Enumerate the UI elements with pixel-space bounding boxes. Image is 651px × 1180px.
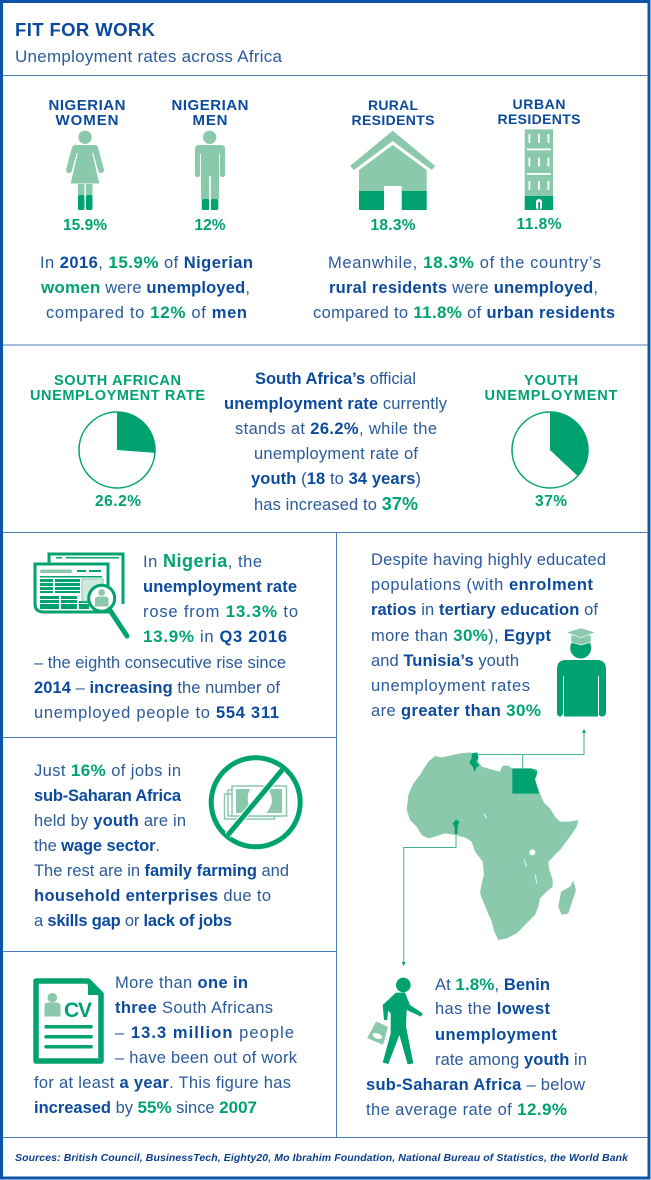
text: wage sector: sub-Saharan Africa [34,787,182,805]
text: Nigerian gender gap: women were unemployed, [40,278,250,297]
title: FIT FOR WORK [15,19,156,40]
panel: Nigeria unemployment [34,551,298,722]
text: South Africa summary [224,370,448,514]
text: out of work: More than one in [115,974,248,992]
icon: graduate [557,628,606,716]
text: rural and urban gap: rural residents were unemployed, [329,279,598,297]
text: Benin: sub-Saharan Africa – below [366,1076,585,1094]
icon: woman [69,131,101,210]
text: Egypt and Tunisia: are greater than 30% [371,701,541,720]
value: 37%: 37% [535,493,567,510]
text: Egypt and Tunisia: ratios in tertiary education of [371,601,598,619]
connector: Egypt and Tunisia to text [478,729,586,768]
text: out of work: three South Africans [115,999,273,1017]
icon: CV document: CV [64,999,92,1022]
heading: Nigerian women: WOMEN [56,112,118,129]
heading: South African unemployment rate [30,373,205,404]
country: Benin [453,819,459,834]
panel: CV and long-term unemployment [34,974,298,1117]
text: Benin [366,975,587,1119]
heading: rural residents: RURAL [368,97,418,113]
icon: no money [211,758,300,847]
text: Egypt and Tunisia: more than 30%), Egypt [371,626,552,645]
text: Nigeria unemployment rate: In Nigeria, the [143,551,262,571]
text: wage sector: The rest are in family farming and [34,862,289,880]
icon: CV document [36,979,102,1061]
text: South Africa summary: unemployment rate of [254,445,418,463]
text: wage sector: the wage sector. [34,837,160,855]
text: Benin: has the lowest [435,1000,550,1018]
text: Benin: At 1.8%, Benin [435,975,550,994]
text: Egypt and Tunisia: and Tunisia’s youth [371,652,519,670]
text: Nigerian gender gap [40,253,253,322]
panel: Nigeria and residents [40,96,615,322]
heading: rural residents [352,97,434,128]
country: Egypt [512,768,539,794]
value: 26.2%: 26.2% [95,493,141,510]
text: South Africa summary: youth (18 to 34 years) [251,470,421,488]
heading: Nigerian women [48,97,126,129]
icon: house [350,131,435,210]
map: Africa [407,752,578,940]
heading: urban residents: RESIDENTS [498,111,580,127]
text: Nigeria unemployment rate: 2014 – increasing the number of [34,679,280,697]
text: Nigerian gender gap: In 2016, 15.9% of Nigerian [40,253,253,272]
text: wage sector: household enterprises due to [34,887,271,905]
text: South Africa summary: South Africa’s official [255,370,416,388]
text: Nigeria unemployment rate: unemployment rate [143,578,297,596]
text: out of work: – 13.3 million people [115,1024,294,1042]
icon: tower block [525,129,553,210]
value: 12%: 12% [194,217,226,234]
heading: youth unemployment: UNEMPLOYMENT [484,388,618,404]
heading: South African unemployment rate: UNEMPLOYMENT RATE [30,388,205,404]
icon: man [195,131,225,210]
text: Nigerian gender gap: compared to 12% of men [46,303,247,322]
panel: youth wage sector [34,758,300,930]
panel: Egypt, Tunisia and Benin [366,551,606,1119]
text: rural and urban gap: Meanwhile, 18.3% of the country’s [328,253,601,272]
text: wage sector: held by youth are in [34,812,186,830]
text: out of work: for at least a year. This figure has [34,1074,291,1092]
heading: youth unemployment [484,373,618,404]
text: Benin: the average rate of 12.9% [366,1100,567,1119]
heading: youth unemployment: YOUTH [524,373,578,389]
heading: urban residents [498,96,580,127]
icon: job seeker with bag [367,978,423,1064]
text: South Africa summary: has increased to 37% [254,494,418,514]
heading: Nigerian men: NIGERIAN [172,97,248,114]
text: Benin: unemployment [435,1026,558,1044]
sources: Sources: British Council, BusinessTech, Eighty20, Mo Ibrahim Foundation, National Bureau of Statistics, the World Bank [15,1152,629,1164]
text: out of work [34,974,298,1117]
text: rural and urban gap: compared to 11.8% of urban residents [313,303,615,322]
text: Nigeria unemployment rate [34,551,298,722]
value: 18.3%: 18.3% [370,217,416,234]
heading: rural residents: RESIDENTS [352,112,434,128]
text: Egypt and Tunisia [371,551,606,720]
text: Benin: rate among youth in [435,1051,587,1069]
connector: Benin to text [402,835,456,966]
text: wage sector [34,761,289,930]
text: Nigeria unemployment rate: – the eighth consecutive rise since [34,654,286,672]
text: Egypt and Tunisia: populations (with enrolment [371,576,594,594]
text: Egypt and Tunisia: unemployment rates [371,677,530,695]
text: rural and urban gap [313,253,615,322]
pie chart: 37% [512,412,588,488]
text: wage sector: a skills gap or lack of jobs [34,912,232,930]
text: Nigeria unemployment rate: unemployed people to 554 311 [34,704,279,722]
heading: Nigerian men: MEN [192,112,228,129]
heading: Nigerian women: NIGERIAN [48,97,126,114]
text: out of work: – have been out of work [115,1049,298,1067]
text: South Africa summary: unemployment rate currently [224,395,448,413]
heading: urban residents: URBAN [512,96,566,112]
subtitle: Unemployment rates across Africa [15,47,283,66]
text: Nigeria unemployment rate: 13.9% in Q3 2016 [143,627,287,646]
value: 15.9%: 15.9% [63,217,107,234]
text: Egypt and Tunisia: Despite having highly educated [371,551,606,569]
heading: Nigerian men [172,97,248,129]
text: South Africa summary: stands at 26.2%, while the [235,420,437,438]
heading: South African unemployment rate: SOUTH AFRICAN [54,373,181,389]
value: 11.8%: 11.8% [516,216,562,233]
icon: newspaper and magnifier [35,554,127,636]
panel: South Africa [30,370,618,514]
text: wage sector: Just 16% of jobs in [34,761,181,780]
country: Tunisia [469,752,479,772]
pie chart: 26.2% [79,412,155,488]
text: Nigeria unemployment rate: rose from 13.3% to [143,602,298,621]
text: out of work: increased by 55% since 2007 [34,1098,257,1117]
